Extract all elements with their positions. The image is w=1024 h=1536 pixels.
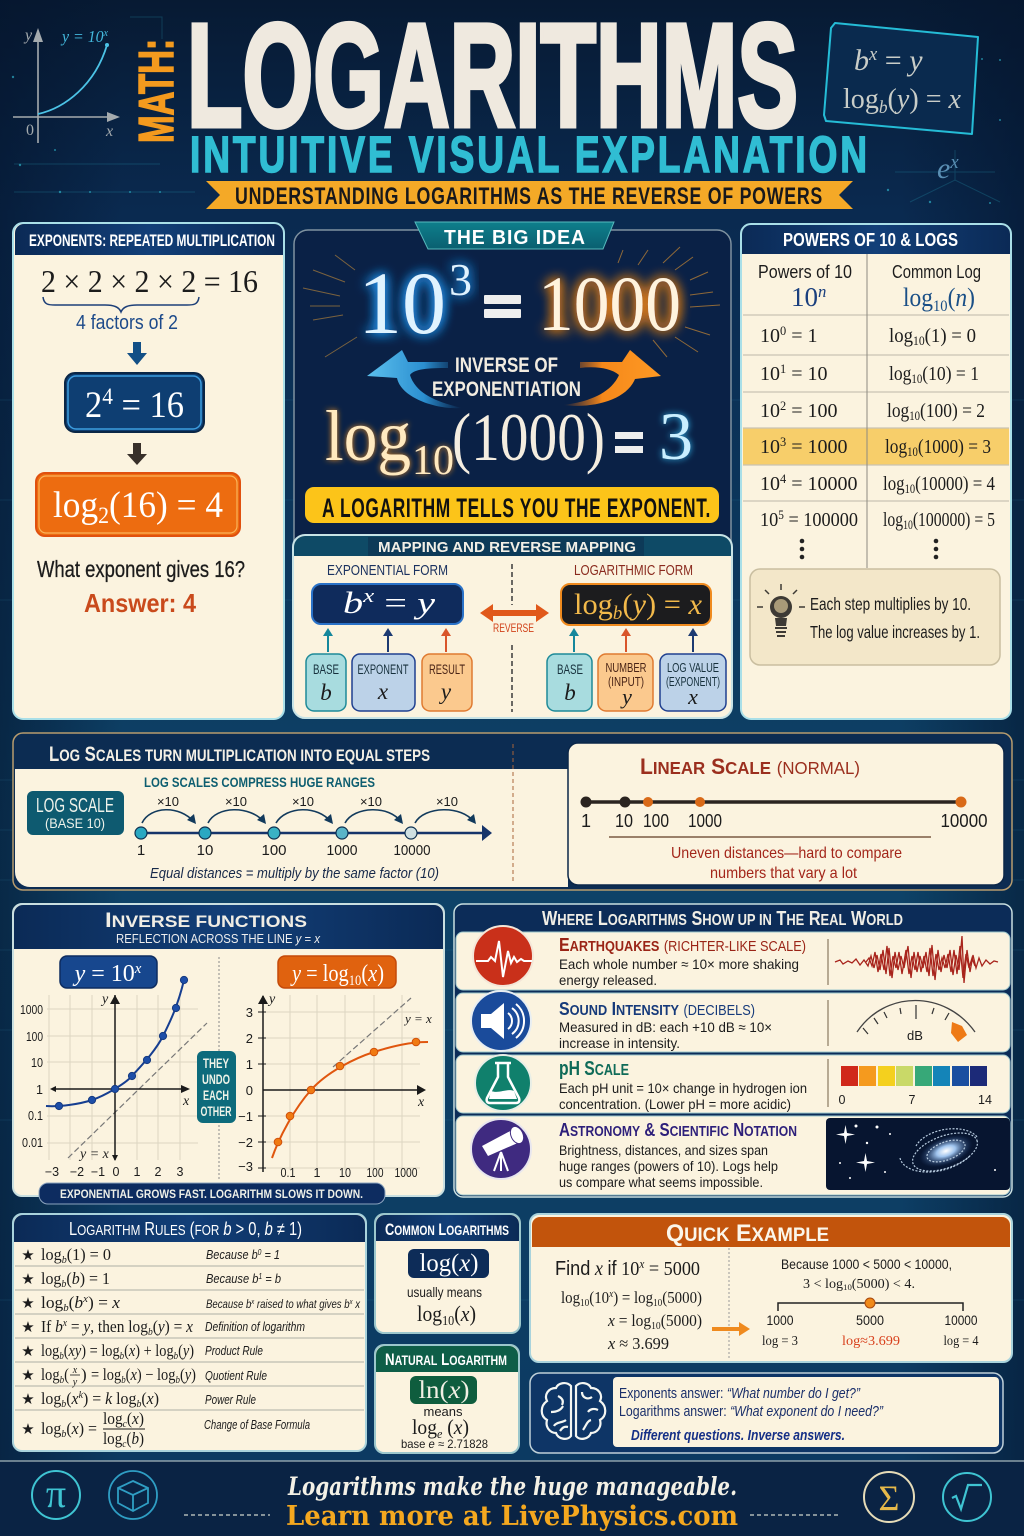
log number line: ×10 <box>360 794 382 809</box>
rule list: logb(1) = 0 <box>41 1245 111 1266</box>
chart: exponential: 1 <box>36 1083 43 1097</box>
rule list: ★ <box>21 1270 35 1288</box>
table: log10(10) = 1 <box>889 363 979 386</box>
label: number input <box>598 654 653 711</box>
label: base: b <box>320 680 332 705</box>
pH colour bar: 0 <box>839 1093 846 1107</box>
heading: LOGARITHM RULES (FOR b > 0, b ≠ 1) <box>69 1219 302 1239</box>
rule list: ★ <box>21 1342 35 1360</box>
linear number line: 100 <box>643 811 669 831</box>
badge: log(x) <box>420 1250 478 1277</box>
label: inverse of exponentiation: EXPONENTIATION <box>432 378 581 401</box>
text: means <box>423 1404 463 1419</box>
worked solution: log10(10x) = log10(5000) <box>561 1288 702 1309</box>
chart: logarithm: 1 <box>314 1166 321 1180</box>
rule list <box>21 1245 196 1450</box>
badge <box>408 1249 489 1278</box>
panel: logarithm rules <box>13 1214 366 1451</box>
chart: exponential: 3 <box>177 1165 184 1179</box>
chart: logarithm: 0 <box>246 1083 253 1098</box>
log number line: ×10 <box>157 794 179 809</box>
row: earthquakes: Each whole number ≈ 10× more shaking <box>559 956 799 972</box>
worked solution: x = log10(5000) <box>607 1311 702 1332</box>
icon: flask <box>475 1055 531 1111</box>
text: Different questions. Inverse answers. <box>631 1427 845 1444</box>
panel: exponents <box>13 223 284 719</box>
question: What exponent gives 16? <box>37 556 245 582</box>
rule list: logb( <box>41 1365 69 1386</box>
rule notes <box>204 1247 361 1432</box>
label: number input: y <box>620 684 632 709</box>
panel: powers of 10 and logs <box>741 224 1011 719</box>
heading: LOG SCALES TURN MULTIPLICATION INTO EQUAL STEPS <box>49 743 430 766</box>
row: astronomy: us compare what seems impossible. <box>559 1174 763 1190</box>
closing message: Learn more at LivePhysics.com <box>286 1501 738 1532</box>
row: earthquakes: EARTHQUAKES (RICHTER-LIKE SCALE) <box>559 935 806 955</box>
chart: exponential: 1000 <box>20 1003 43 1017</box>
rule list: logb(xy) = logb(x) + logb(y) <box>41 1341 194 1362</box>
equation: logarithm <box>325 396 693 484</box>
table: 10n <box>791 282 826 312</box>
rule notes: Quotient Rule <box>205 1368 267 1383</box>
row: astronomy: ASTRONOMY & SCIENTIFIC NOTATION <box>559 1120 797 1140</box>
gauge: dB <box>907 1028 923 1043</box>
rule list: ★ <box>21 1294 35 1312</box>
log number line: ×10 <box>225 794 247 809</box>
heading: WHERE LOGARITHMS SHOW UP IN THE REAL WORLD <box>542 908 903 930</box>
text: Logarithms answer: “What exponent do I need?” <box>619 1404 884 1420</box>
row: sound: SOUND INTENSITY (DECIBELS) <box>559 999 755 1019</box>
chart: logarithm: −3 <box>238 1159 253 1174</box>
equation: power: 1000 <box>538 260 681 347</box>
icon: light bulb <box>757 584 805 636</box>
table: log10(n) <box>903 283 975 314</box>
icon: brain <box>542 1383 605 1439</box>
table: Powers of 10 <box>758 262 852 282</box>
reasoning: Because 1000 < 5000 < 10000, <box>781 1256 952 1272</box>
chart: exponential: x <box>182 1094 190 1109</box>
icon: exponential graph: 0 <box>26 122 34 139</box>
panel: log scales <box>13 733 1012 890</box>
rule notes: Because bx raised to what gives bx x <box>206 1297 361 1311</box>
row: astronomy: Brightness, distances, and sizes span <box>559 1142 768 1158</box>
worked solution: Find x if 10x = 5000 <box>555 1257 700 1280</box>
icon: cube <box>109 1471 157 1519</box>
answer: Answer: 4 <box>84 588 196 618</box>
chart: exponential <box>20 976 207 1179</box>
log number line: 10 <box>197 842 213 859</box>
chart: exponential: 10 <box>31 1056 43 1070</box>
galaxy image <box>826 1118 1010 1190</box>
worked solution <box>555 1257 702 1353</box>
seismograph <box>835 936 998 983</box>
chart: logarithm: 0.1 <box>280 1166 296 1180</box>
chart: exponential: 0.1 <box>28 1109 43 1123</box>
callout: they undo each other: UNDO <box>202 1072 230 1087</box>
subheading: REFLECTION ACROSS THE LINE y = x <box>116 931 320 946</box>
caption: factors: 4 factors of 2 <box>76 312 178 334</box>
formula card: bx = y <box>854 44 923 77</box>
label: inverse of exponentiation <box>432 354 581 401</box>
arrow <box>127 342 147 365</box>
row: pH: Each pH unit = 10× change in hydrogen ion <box>559 1080 807 1096</box>
log number line <box>135 794 492 859</box>
equation: logarithm: log <box>325 396 411 476</box>
panel: the big idea <box>294 222 731 555</box>
label: log value: x <box>687 684 698 709</box>
footer <box>0 1461 1024 1536</box>
chart: exponential: −1 <box>91 1165 105 1179</box>
badge: exponential: y = 10x <box>73 961 142 987</box>
rule notes: Change of Base Formula <box>204 1417 310 1432</box>
arrow <box>127 443 147 465</box>
log box: log2(16) = 4 <box>53 485 223 528</box>
icon: pi: π <box>46 1471 66 1516</box>
chart: exponential: −3 <box>45 1165 59 1179</box>
caption: Uneven distances—hard to compare <box>671 845 902 862</box>
equation: power: 3 <box>449 254 472 305</box>
rule list: logc(x) <box>103 1409 144 1430</box>
icon: sigma: Σ <box>879 1478 899 1518</box>
label: base: b <box>564 680 576 705</box>
callout: they undo each other <box>197 1051 236 1123</box>
closing message: Logarithms make the huge manageable. <box>287 1472 737 1501</box>
number line: 5000 <box>856 1312 884 1328</box>
log scale badge: LOG SCALE <box>36 795 114 817</box>
callout: they undo each other: THEY <box>203 1056 229 1071</box>
exponent box: 24 = 16 <box>85 384 184 426</box>
text <box>619 1386 884 1444</box>
chart: logarithm: 100 <box>366 1166 384 1180</box>
panel: key takeaway <box>530 1373 1003 1453</box>
pH colour bar: 7 <box>909 1093 916 1107</box>
rule list: logb(b) = 1 <box>41 1269 110 1290</box>
chart: logarithm: 10 <box>339 1166 351 1180</box>
label: base <box>306 654 346 711</box>
arrows: inverse <box>367 350 661 408</box>
row: earthquakes: energy released. <box>559 972 657 988</box>
logarithmic form: logb(y) = x <box>574 588 703 624</box>
number line <box>762 1298 978 1349</box>
panel heading: MAPPING AND REVERSE MAPPING <box>378 539 636 556</box>
pH colour bar: 14 <box>978 1093 992 1107</box>
pH colour bar <box>839 1066 992 1107</box>
label: base: BASE <box>557 662 583 677</box>
badge: exponential <box>60 956 157 988</box>
panel heading: POWERS OF 10 & LOGS <box>783 230 958 250</box>
chart: exponential: 2 <box>155 1165 162 1179</box>
callout: they undo each other: OTHER <box>200 1104 232 1119</box>
rule list: logc(b) <box>103 1429 144 1450</box>
icon: e to the x: ex <box>937 152 959 185</box>
number line: log≈3.699 <box>842 1334 900 1349</box>
table: log10(10000) = 4 <box>883 473 995 496</box>
table <box>743 254 1009 568</box>
table: log10(1000) = 3 <box>885 436 991 459</box>
chart: logarithm: y = x <box>403 1011 432 1026</box>
label: inverse of exponentiation: INVERSE OF <box>455 354 558 377</box>
log scale badge: (BASE 10) <box>45 815 105 831</box>
chart: exponential: 100 <box>26 1030 43 1044</box>
log number line: 100 <box>261 842 287 859</box>
log number line: 1000 <box>326 842 358 859</box>
panel: linear scale <box>568 743 1004 885</box>
icon: exponential graph: y = 10x <box>60 27 108 46</box>
label: result <box>422 654 472 711</box>
number line: 10000 <box>944 1312 978 1328</box>
chart: logarithm: 3 <box>246 1005 253 1020</box>
reasoning: 3 < log10(5000) < 4. <box>803 1277 915 1292</box>
label: exponent <box>352 654 415 711</box>
icon: earthquake <box>473 926 533 986</box>
label: exponent: EXPONENT <box>358 662 408 677</box>
rays <box>303 247 720 357</box>
caption: numbers that vary a lot <box>710 865 857 882</box>
rule notes: Power Rule <box>205 1392 256 1407</box>
label: result: RESULT <box>429 662 465 677</box>
chart: logarithm: x <box>417 1095 425 1110</box>
icon: exponential graph <box>13 27 120 143</box>
row: pH: concentration. (Lower pH = more acidic) <box>559 1096 791 1112</box>
formula: log10(x) <box>417 1301 476 1328</box>
table: 103 = 1000 <box>760 435 847 458</box>
table: 105 = 100000 <box>760 508 858 531</box>
table: 101 = 10 <box>760 362 827 385</box>
chart: logarithm: −2 <box>238 1135 253 1150</box>
label: log value <box>660 654 726 711</box>
rule list: x <box>72 1365 78 1376</box>
logarithmic form: LOGARITHMIC FORM <box>574 563 693 579</box>
text: usually means <box>407 1284 482 1300</box>
table: log10(100000) = 5 <box>883 509 995 532</box>
table: 104 = 10000 <box>760 472 857 495</box>
log scale badge <box>27 791 124 835</box>
arrow <box>712 1322 750 1336</box>
closing message <box>286 1472 738 1532</box>
chart: exponential: 1 <box>134 1165 141 1179</box>
panel: real world <box>454 904 1012 1197</box>
exponential form: EXPONENTIAL FORM <box>327 563 448 579</box>
chart: logarithm: y <box>267 992 276 1007</box>
rule list: logb(x) = <box>41 1419 97 1440</box>
table: log10(100) = 2 <box>887 400 985 423</box>
arrows: pointers <box>323 628 698 652</box>
ribbon subtitle: UNDERSTANDING LOGARITHMS AS THE REVERSE OF POWERS <box>235 183 823 210</box>
rule list: ★ <box>21 1420 35 1438</box>
chart: logarithm: −1 <box>238 1109 253 1124</box>
row: sound: increase in intensity. <box>559 1035 680 1051</box>
rule list: = logb(x) − logb(y) <box>91 1365 196 1386</box>
callout: key statement <box>305 487 719 523</box>
row: astronomy: huge ranges (powers of 10). Logs help <box>559 1158 778 1174</box>
formula card <box>824 23 978 134</box>
number line: 1000 <box>766 1312 794 1328</box>
log number line: ×10 <box>292 794 314 809</box>
log number line: ×10 <box>436 794 458 809</box>
linear number line: 10000 <box>940 811 988 831</box>
arrow: reverse <box>480 604 549 635</box>
exponential form: bx = y <box>343 585 435 620</box>
callout: growth summary <box>39 1183 385 1204</box>
label: log value: LOG VALUE <box>667 660 719 675</box>
callout: tip <box>750 569 1000 665</box>
chart: logarithm: 1000 <box>394 1166 418 1180</box>
exponential form <box>312 563 463 624</box>
rule list: logb(bx) = x <box>41 1293 120 1314</box>
reasoning <box>781 1256 952 1292</box>
table: Common Log <box>892 262 981 282</box>
chart: exponential: 0 <box>113 1165 120 1179</box>
tab heading: THE BIG IDEA <box>444 227 586 249</box>
equation: logarithm: 10 <box>412 438 454 484</box>
linear number line: 1000 <box>688 811 722 831</box>
logarithmic form <box>561 563 711 625</box>
rule notes: Product Rule <box>205 1343 263 1358</box>
badge: logarithm <box>278 956 396 989</box>
label: base <box>547 654 592 711</box>
row: sound: Measured in dB: each +10 dB ≈ 10× <box>559 1019 772 1035</box>
icon: pi <box>32 1471 80 1519</box>
panel: mapping <box>293 535 732 718</box>
rule list: ★ <box>21 1390 35 1408</box>
heading: COMMON LOGARITHMS <box>385 1220 509 1239</box>
note: base e ≈ 2.71828 <box>401 1437 488 1451</box>
log box <box>36 473 240 536</box>
callout: tip: Each step multiplies by 10. <box>810 594 971 614</box>
chart: exponential: y <box>100 992 109 1007</box>
row: astronomy <box>456 1116 1010 1195</box>
log number line: 10000 <box>394 842 430 859</box>
rule list: y <box>72 1377 78 1388</box>
row: pH: pH SCALE <box>559 1058 629 1080</box>
equation: logarithm: 3 <box>659 398 693 474</box>
label: number input: NUMBER <box>606 660 646 675</box>
icon: square root <box>943 1473 991 1521</box>
table: 100 = 1 <box>760 324 817 347</box>
text: Exponents answer: “What number do I get?” <box>619 1386 861 1402</box>
linear number line <box>580 796 988 831</box>
caption: Equal distances = multiply by the same factor (10) <box>150 865 439 882</box>
rule list: If bx = y, then logb(y) = x <box>41 1317 193 1338</box>
formula card: logb(y) = x <box>843 83 961 117</box>
linear number line: 10 <box>615 811 633 831</box>
brace <box>43 297 199 312</box>
row: earthquakes <box>456 926 1010 990</box>
equation: power: 10 <box>358 255 446 353</box>
row: sound <box>456 991 1010 1052</box>
panel: linear scale: LINEAR SCALE (NORMAL) <box>640 754 860 779</box>
rule notes: Because b0 = 1 <box>206 1247 280 1262</box>
chart: exponential: 0.01 <box>22 1136 43 1150</box>
chart: logarithm <box>238 992 432 1180</box>
number line: log = 3 <box>762 1334 798 1349</box>
icon: telescope <box>471 1119 531 1179</box>
callout: key statement: A LOGARITHM TELLS YOU THE EXPONENT. <box>322 493 711 523</box>
rule list: ★ <box>21 1246 35 1264</box>
worked solution: x ≈ 3.699 <box>607 1334 669 1353</box>
caption <box>671 845 902 882</box>
chart: exponential: y = x <box>78 1147 110 1162</box>
heading: INVERSE FUNCTIONS <box>105 909 307 932</box>
chart: exponential: −2 <box>70 1165 84 1179</box>
arrow: reverse: REVERSE <box>493 621 534 635</box>
label: exponent: x <box>377 679 389 704</box>
table: log10(1) = 0 <box>889 325 976 348</box>
label: number input: (INPUT) <box>608 674 644 689</box>
icon: exponential graph: y <box>23 27 33 44</box>
number line: log = 4 <box>944 1334 978 1349</box>
rule list: ★ <box>21 1318 35 1336</box>
icon: sigma <box>864 1472 914 1522</box>
icon: exponential graph: x <box>105 123 113 140</box>
rule notes: Because b1 = b <box>206 1271 281 1286</box>
heading: NATURAL LOGARITHM <box>385 1350 507 1369</box>
icon: speaker <box>471 991 531 1051</box>
equation: power <box>358 254 681 353</box>
tab heading <box>415 222 614 249</box>
callout: they undo each other: EACH <box>203 1088 229 1103</box>
panel: common logarithms <box>375 1214 520 1333</box>
heading: QUICK EXAMPLE <box>666 1220 829 1247</box>
row: pH <box>456 1055 1010 1113</box>
label: base: BASE <box>313 662 339 677</box>
chart: logarithm: 1 <box>246 1057 253 1072</box>
formula: loge (x) <box>412 1415 469 1441</box>
linear number line: 1 <box>581 811 591 831</box>
rule list: ) <box>81 1365 87 1384</box>
panel heading: EXPONENTS: REPEATED MULTIPLICATION <box>29 231 275 250</box>
title <box>130 0 870 210</box>
subheading: LOG SCALES COMPRESS HUGE RANGES <box>144 774 375 790</box>
badge: logarithm: y = log10(x) <box>290 961 384 989</box>
panel: inverse functions <box>13 904 444 1204</box>
table: 102 = 100 <box>760 399 837 422</box>
callout: growth summary: EXPONENTIAL GROWS FAST. LOGARITHM SLOWS IT DOWN. <box>60 1187 363 1201</box>
equation: logarithm: (1000) <box>452 399 605 475</box>
exponent box <box>65 373 204 432</box>
label: log value: (EXPONENT) <box>666 674 720 689</box>
rule list: logb(xk) = k logb(x) <box>41 1389 159 1410</box>
gauge <box>857 1000 975 1043</box>
panel: natural logarithm <box>375 1345 519 1453</box>
panel: quick example <box>530 1214 1012 1362</box>
label: result: y <box>439 679 452 704</box>
log number line: 1 <box>137 842 145 859</box>
rule list: ★ <box>21 1366 35 1384</box>
rule notes: Definition of logarithm <box>205 1319 305 1334</box>
chart: logarithm: 2 <box>246 1031 253 1046</box>
badge: ln(x) <box>418 1377 470 1404</box>
repeated multiplication equation: 2 × 2 × 2 × 2 = 16 <box>41 263 258 299</box>
